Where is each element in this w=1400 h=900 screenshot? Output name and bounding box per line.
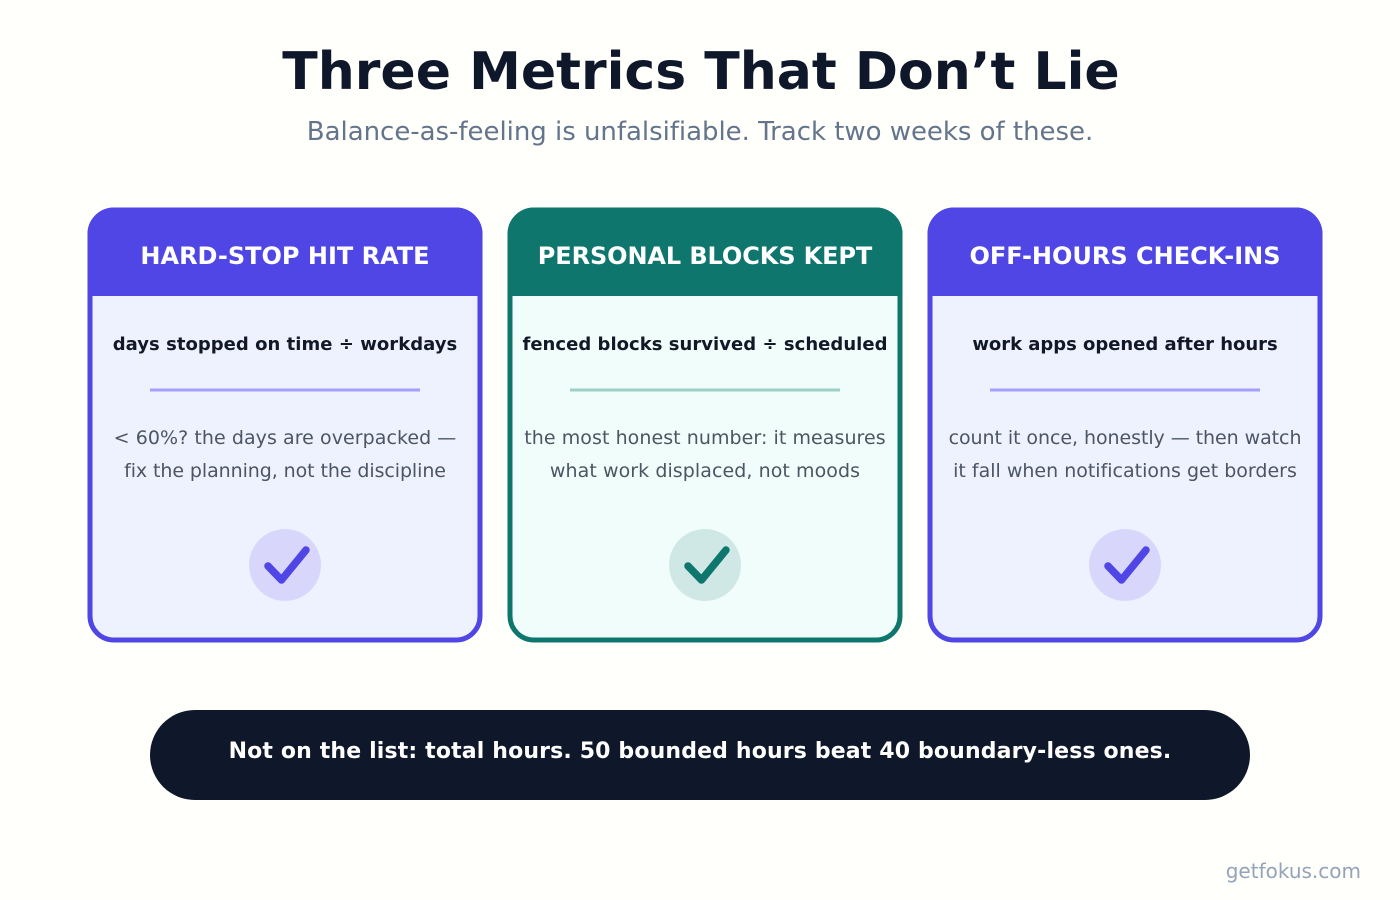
heading: personal blocks kept: PERSONAL BLOCKS KEPT <box>538 242 872 270</box>
description: count it once, honestly — then watch <box>949 427 1301 449</box>
description: fix the planning, not the discipline <box>124 460 446 482</box>
formula: work apps opened after hours <box>972 334 1278 355</box>
panel: personal blocks kept <box>508 208 902 642</box>
description: what work displaced, not moods <box>550 460 860 482</box>
subtitle: Balance-as-feeling is unfalsifiable. Track two weeks of these. <box>307 117 1093 147</box>
description <box>524 427 886 482</box>
formula: fenced blocks survived ÷ scheduled <box>522 334 888 355</box>
heading: off-hours check-ins: OFF-HOURS CHECK-INS <box>970 242 1280 270</box>
description <box>949 427 1301 482</box>
footer brand: getfokus.com <box>1226 859 1361 883</box>
panel: hard-stop hit rate <box>88 208 482 642</box>
title: Three Metrics That Don’t Lie <box>282 42 1120 102</box>
callout banner <box>150 710 1250 800</box>
description: < 60%? the days are overpacked — <box>114 427 456 449</box>
description: it fall when notifications get borders <box>953 460 1297 482</box>
formula: days stopped on time ÷ workdays <box>113 334 457 355</box>
description: the most honest number: it measures <box>524 427 886 449</box>
callout text: Not on the list: total hours. 50 bounded hours beat 40 boundary-less ones. <box>229 739 1171 764</box>
panel: off-hours check-ins <box>928 208 1322 642</box>
heading: hard-stop hit rate: HARD-STOP HIT RATE <box>140 242 430 270</box>
description <box>114 427 456 482</box>
